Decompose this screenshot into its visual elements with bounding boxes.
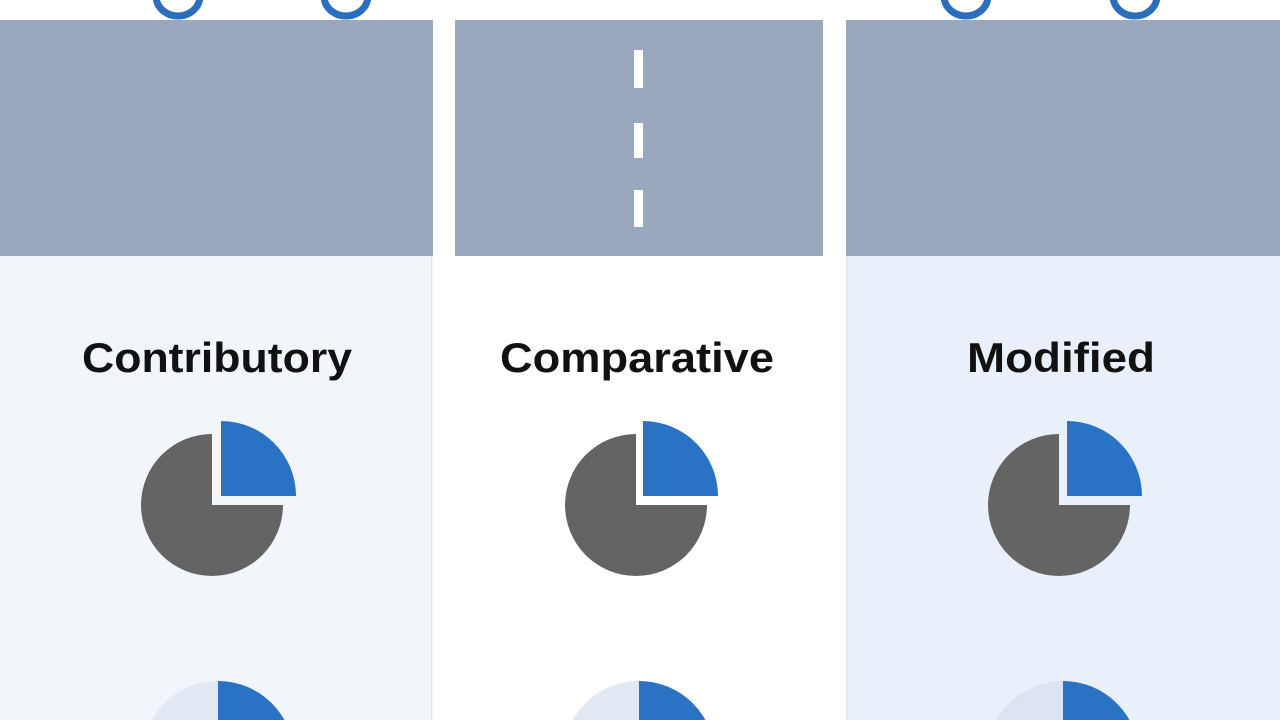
chart: pie Modified	[988, 421, 1142, 576]
heading: Modified: Modified	[967, 334, 1155, 381]
chart: bottom pies	[142, 681, 1139, 720]
chart: pie Contributory	[141, 421, 296, 576]
road band	[0, 20, 1280, 256]
panel: column backgrounds	[0, 256, 1280, 720]
chart: pie Comparative	[565, 421, 718, 576]
icon: location pins	[156, 0, 1157, 16]
heading: Contributory: Contributory	[82, 334, 353, 381]
heading: Comparative: Comparative	[500, 334, 774, 381]
